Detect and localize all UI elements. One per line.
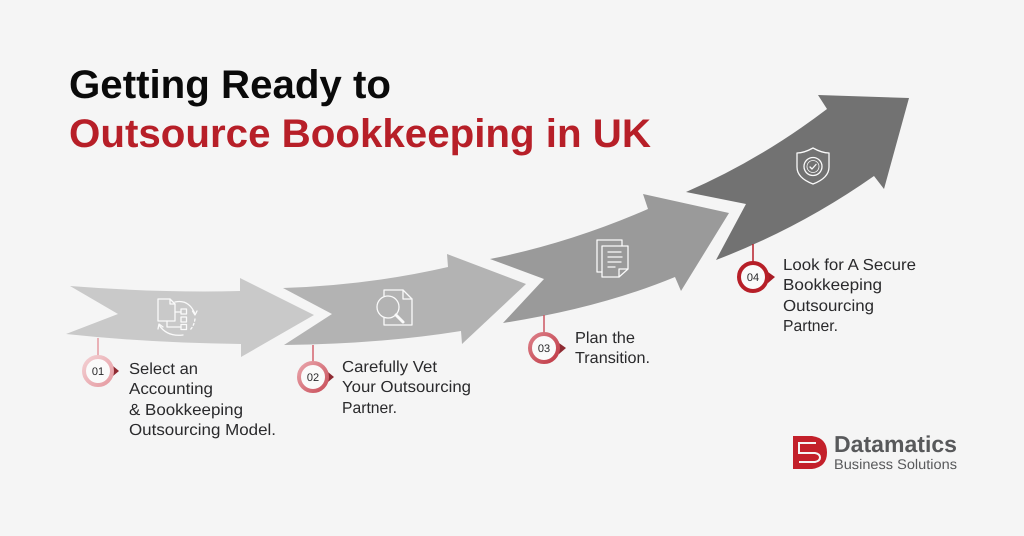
arrow 3 <box>490 194 729 323</box>
step 04: 04 <box>747 272 759 284</box>
step 03: 03 <box>538 343 550 355</box>
icon: logo mark <box>793 436 827 469</box>
logo: Business Solutions <box>834 456 957 472</box>
title: Getting Ready to <box>69 63 391 107</box>
logo: Datamatics <box>834 431 957 457</box>
step 01: Accounting <box>129 381 213 398</box>
title <box>69 63 651 156</box>
step 01: 01 <box>92 366 104 378</box>
step 01 <box>84 338 276 439</box>
step 02: Partner. <box>342 400 397 417</box>
step 03: Transition. <box>575 350 650 367</box>
step 04: Look for A Secure <box>783 257 916 274</box>
logo <box>793 431 957 472</box>
arrow 1 <box>66 278 314 357</box>
step 02: Carefully Vet <box>342 359 438 376</box>
icon: accounting model <box>158 299 197 335</box>
icon: documents <box>597 240 628 277</box>
step 02 <box>299 345 471 417</box>
step 01: Outsourcing Model. <box>129 422 276 439</box>
arrow 2 <box>283 254 526 345</box>
icon: shield <box>797 148 829 184</box>
step 01: & Bookkeeping <box>129 402 243 419</box>
step 04 <box>739 244 916 335</box>
step 04: Outsourcing <box>783 298 874 315</box>
step 01: Select an <box>129 361 198 378</box>
step 02: 02 <box>307 372 319 384</box>
step 04: Bookkeeping <box>783 277 882 294</box>
step 03 <box>530 315 650 367</box>
icon: document search <box>377 290 412 325</box>
title: Outsource Bookkeeping in UK <box>69 112 651 156</box>
step 04: Partner. <box>783 318 838 335</box>
step 03: Plan the <box>575 330 635 347</box>
arrow 4 <box>686 95 909 260</box>
step 02: Your Outsourcing <box>342 379 471 396</box>
